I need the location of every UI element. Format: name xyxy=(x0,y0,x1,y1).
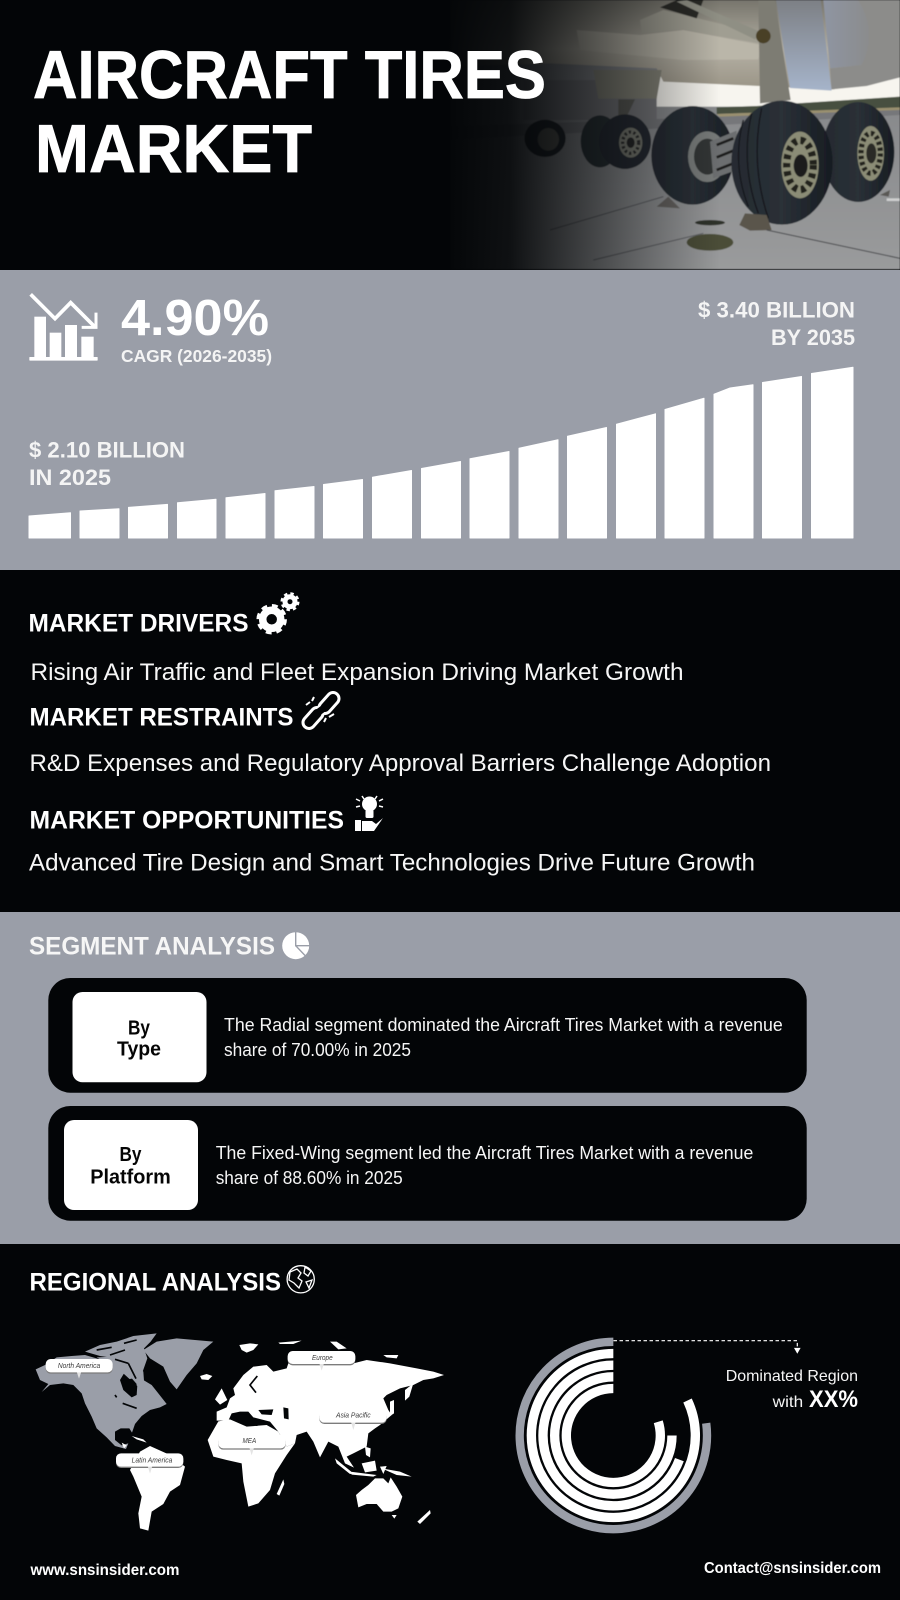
header photo: aircraft landing gear xyxy=(450,0,900,269)
callout: dominated region xyxy=(726,1368,858,1413)
text: by platform description: The Fixed-Wing segment led the Aircraft Tires Market with a revenue xyxy=(216,1143,753,1163)
footer: website: www.snsinsider.com xyxy=(30,1562,179,1579)
heading: regional analysis: REGIONAL ANALYSIS xyxy=(30,1268,281,1296)
icon: globe xyxy=(287,1266,314,1293)
heading: market opportunities: MARKET OPPORTUNITIES xyxy=(30,806,344,834)
icon: pie chart xyxy=(282,932,310,959)
icon: gears xyxy=(258,594,298,633)
panel: market dynamics xyxy=(28,594,771,876)
callout: dominated region: with xyxy=(772,1394,803,1411)
header panel xyxy=(33,0,900,270)
callout: europe: Europe xyxy=(312,1355,333,1362)
end value: BY 2035 xyxy=(771,325,855,350)
label box: by type: By xyxy=(128,1018,151,1040)
title: AIRCRAFT TIRES xyxy=(33,37,546,113)
world map xyxy=(36,1333,444,1531)
callout: latin america: Latin America xyxy=(132,1458,172,1465)
panel: regional analysis xyxy=(30,1266,858,1531)
callout: mea xyxy=(218,1435,286,1455)
title: MARKET xyxy=(35,111,312,187)
text: by platform description xyxy=(216,1143,753,1188)
icon: broken link xyxy=(301,690,341,731)
CAGR label: CAGR (2026-2035) xyxy=(121,346,272,366)
callout: latin america xyxy=(116,1453,183,1474)
region: north america (highlighted) xyxy=(36,1333,213,1449)
heading: market drivers: MARKET DRIVERS xyxy=(28,610,248,638)
label box: by type xyxy=(72,992,206,1082)
callout: mea: MEA xyxy=(242,1438,256,1445)
panel: segment analysis xyxy=(0,912,900,1244)
text: by type description: share of 70.00% in 2025 xyxy=(224,1040,411,1060)
footer: contact: Contact@snsinsider.com xyxy=(704,1560,881,1577)
segment card: by type xyxy=(48,978,807,1093)
text: opportunity: Advanced Tire Design and Smart Technologies Drive Future Growth xyxy=(29,850,755,876)
callout: north america: North America xyxy=(58,1363,100,1370)
text: by platform description: share of 88.60% in 2025 xyxy=(216,1168,403,1188)
text: driver: Rising Air Traffic and Fleet Expansion Driving Market Growth xyxy=(30,659,684,686)
heading: market restraints: MARKET RESTRAINTS xyxy=(30,704,294,732)
dashed leader arrow xyxy=(614,1341,800,1352)
region: rest of world xyxy=(122,1341,444,1531)
start value: IN 2025 xyxy=(29,465,111,490)
text: by type description xyxy=(224,1015,783,1060)
end value: $ 3.40 BILLION xyxy=(698,298,855,322)
segment card: by platform xyxy=(48,1106,807,1221)
label box: by platform xyxy=(64,1120,198,1210)
title xyxy=(33,37,546,187)
panel: market size growth xyxy=(0,270,900,570)
bar chart xyxy=(29,367,853,538)
radial bar chart xyxy=(520,1342,707,1529)
text: restraint: R&D Expenses and Regulatory Approval Barriers Challenge Adoption xyxy=(30,750,771,777)
icon: idea in hand xyxy=(355,796,383,831)
callout: europe xyxy=(288,1351,355,1371)
callout: dominated region: XX% xyxy=(809,1386,858,1413)
label box: by platform: Platform xyxy=(90,1166,171,1188)
callout: north america xyxy=(46,1359,113,1379)
callout: asia pacific: Asia Pacific xyxy=(335,1413,371,1420)
icon: growth chart xyxy=(29,294,98,361)
start value: $ 2.10 BILLION xyxy=(29,438,185,462)
photo fade to black xyxy=(440,0,720,270)
start value xyxy=(29,438,185,490)
text: by type description: The Radial segment dominated the Aircraft Tires Market with a revenue xyxy=(224,1015,783,1035)
heading: segment analysis: SEGMENT ANALYSIS xyxy=(29,932,275,960)
label box: by platform: By xyxy=(120,1144,142,1166)
label box: by type: Type xyxy=(117,1038,161,1060)
CAGR value: 4.90% xyxy=(121,289,269,346)
callout: asia pacific xyxy=(319,1410,387,1430)
end value xyxy=(698,298,855,350)
callout: dominated region: Dominated Region xyxy=(726,1368,858,1385)
